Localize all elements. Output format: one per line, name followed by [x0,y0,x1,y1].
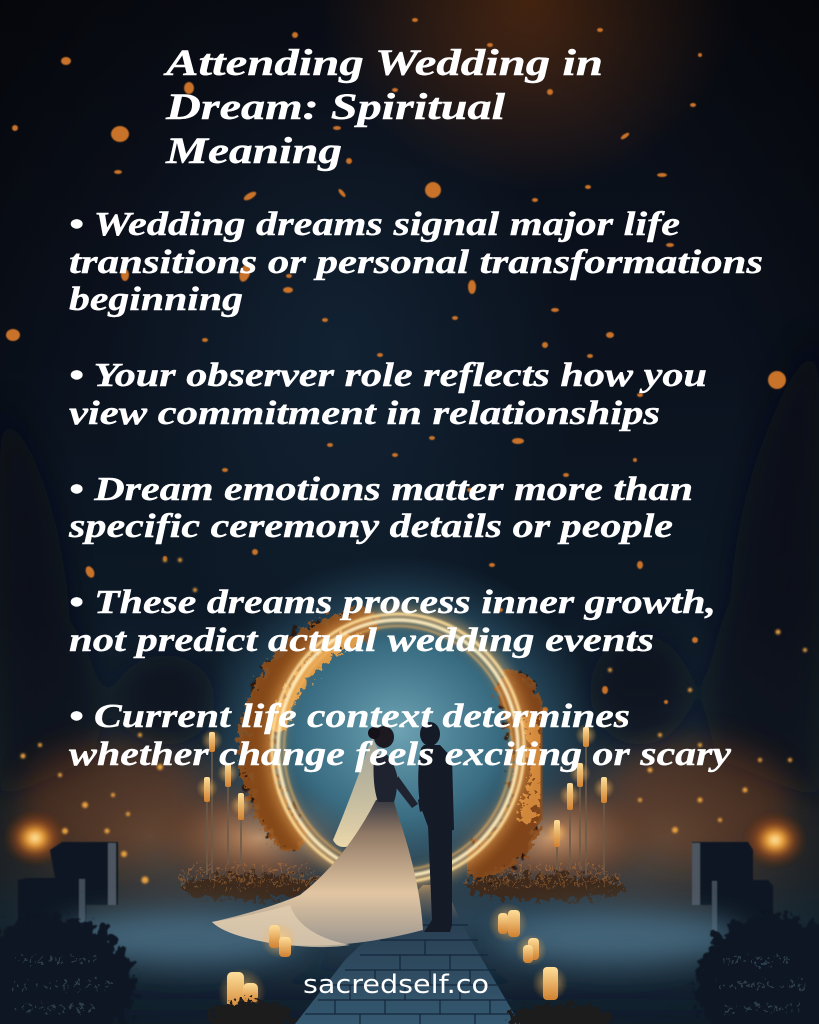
ground candles [218,903,568,1016]
stone path [295,885,520,1024]
bullet: wedding dreams signal transitions [69,206,763,318]
bullet: wedding dreams signal transitions: beginning [69,281,243,318]
mist over the ground [0,912,819,1024]
bullet: observer role [69,357,707,432]
bokeh lights [20,558,807,884]
veil [333,737,388,847]
glowing ring arch [272,614,524,882]
title: Attending Wedding in [163,43,603,84]
plinth pair, left [18,842,118,940]
bullet: life context: whether change feels exciting or scary [69,736,732,773]
bullet: wedding dreams signal transitions: transitions or personal transformations [69,244,763,281]
bullet: life context [69,698,732,773]
bride [212,726,423,947]
head [374,726,394,748]
torso [374,754,397,802]
right fire glow [610,740,807,868]
bullet: observer role: • Your observer role reflects how you [69,357,707,394]
plinth pair, right [692,842,773,941]
left fire glow [3,740,200,866]
bullet: life context: • Current life context determines [69,698,630,735]
dark flower bushes in the foreground [0,915,819,1024]
bullet: wedding dreams signal transitions: • Wedding dreams signal major life [69,206,680,243]
bullet: dream emotions [68,471,693,545]
falling petals [6,18,786,713]
bullet: dream emotions: • Dream emotions matter more than [69,471,693,508]
autumn foliage on the arch [256,626,537,862]
title: Meaning [165,131,342,172]
dress and train [212,795,423,946]
groom [418,722,454,932]
bullet: inner growth: • These dreams process inner growth, [69,584,716,621]
website credit: sacredself.co [303,970,489,1000]
candles on tall stands [196,724,615,875]
bullet: inner growth: not predict actual wedding events [69,622,654,659]
low shrubs behind the couple [180,868,625,900]
title: Dream: Spiritual [165,87,506,128]
bullet: dream emotions: specific ceremony details or people [68,508,673,545]
bullet: observer role: view commitment in relationships [69,395,660,432]
dark tree silhouettes in the background [0,330,819,800]
title [163,43,603,172]
bullet: inner growth [69,584,716,659]
